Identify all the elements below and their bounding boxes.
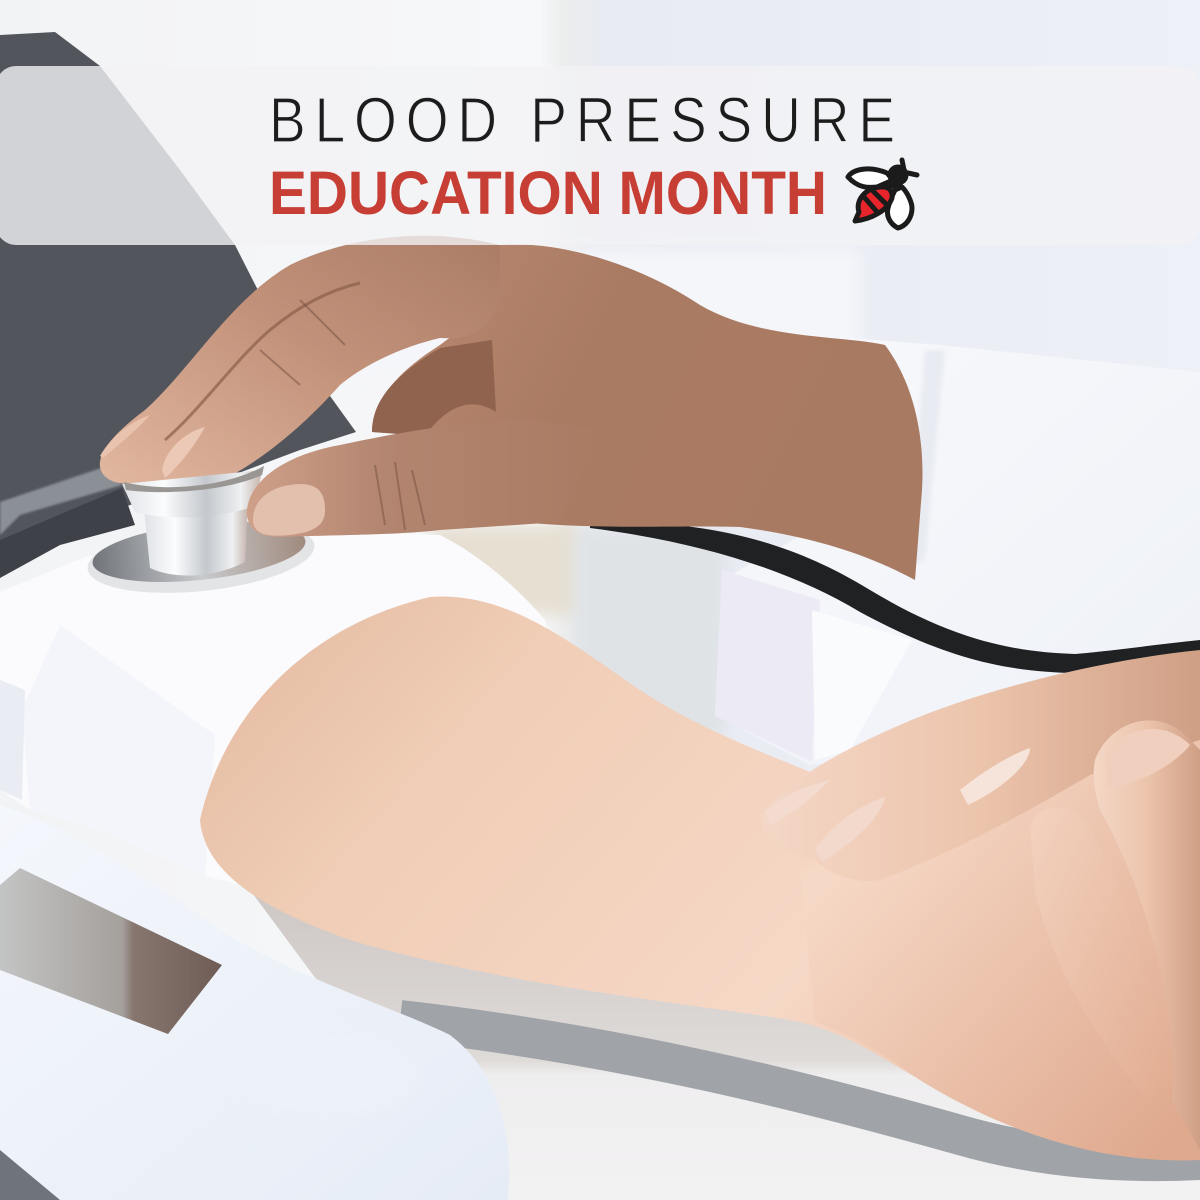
crease between fingers (165, 283, 360, 440)
doctor white coat sleeve (715, 338, 1200, 765)
icon: bee logo (848, 160, 917, 228)
thumb nail (253, 484, 325, 536)
heading: education month: EDUCATION MONTH (269, 159, 827, 227)
sleeve lower fold (0, 488, 135, 578)
back of hand and wrist (372, 244, 923, 580)
inner palm shadow (372, 340, 496, 436)
table surface (250, 890, 1200, 1200)
thumb (247, 420, 600, 537)
monitor tube (400, 1020, 1200, 1161)
patient palm (800, 740, 1200, 1160)
title banner (0, 66, 1200, 245)
patient forearm (200, 596, 1200, 1160)
doctor hand (84, 236, 923, 603)
device screen (0, 868, 222, 1034)
patient thumb and curled finger (1030, 720, 1200, 1150)
fingernail (100, 415, 150, 458)
fingernail (162, 427, 205, 478)
sleeve fold highlight (0, 465, 122, 535)
white cuff on patient's arm (0, 530, 560, 900)
dark blouse sleeve (0, 32, 356, 578)
fingers pressing the chest piece (100, 236, 500, 486)
stethoscope chest piece (84, 466, 318, 603)
stethoscope tube (590, 520, 1200, 673)
patient fingers resting on wrist (762, 650, 1200, 881)
knuckle creases (260, 300, 425, 530)
heading: blood pressure: BLOOD PRESSURE (269, 84, 895, 156)
blood pressure monitor device (0, 805, 509, 1200)
